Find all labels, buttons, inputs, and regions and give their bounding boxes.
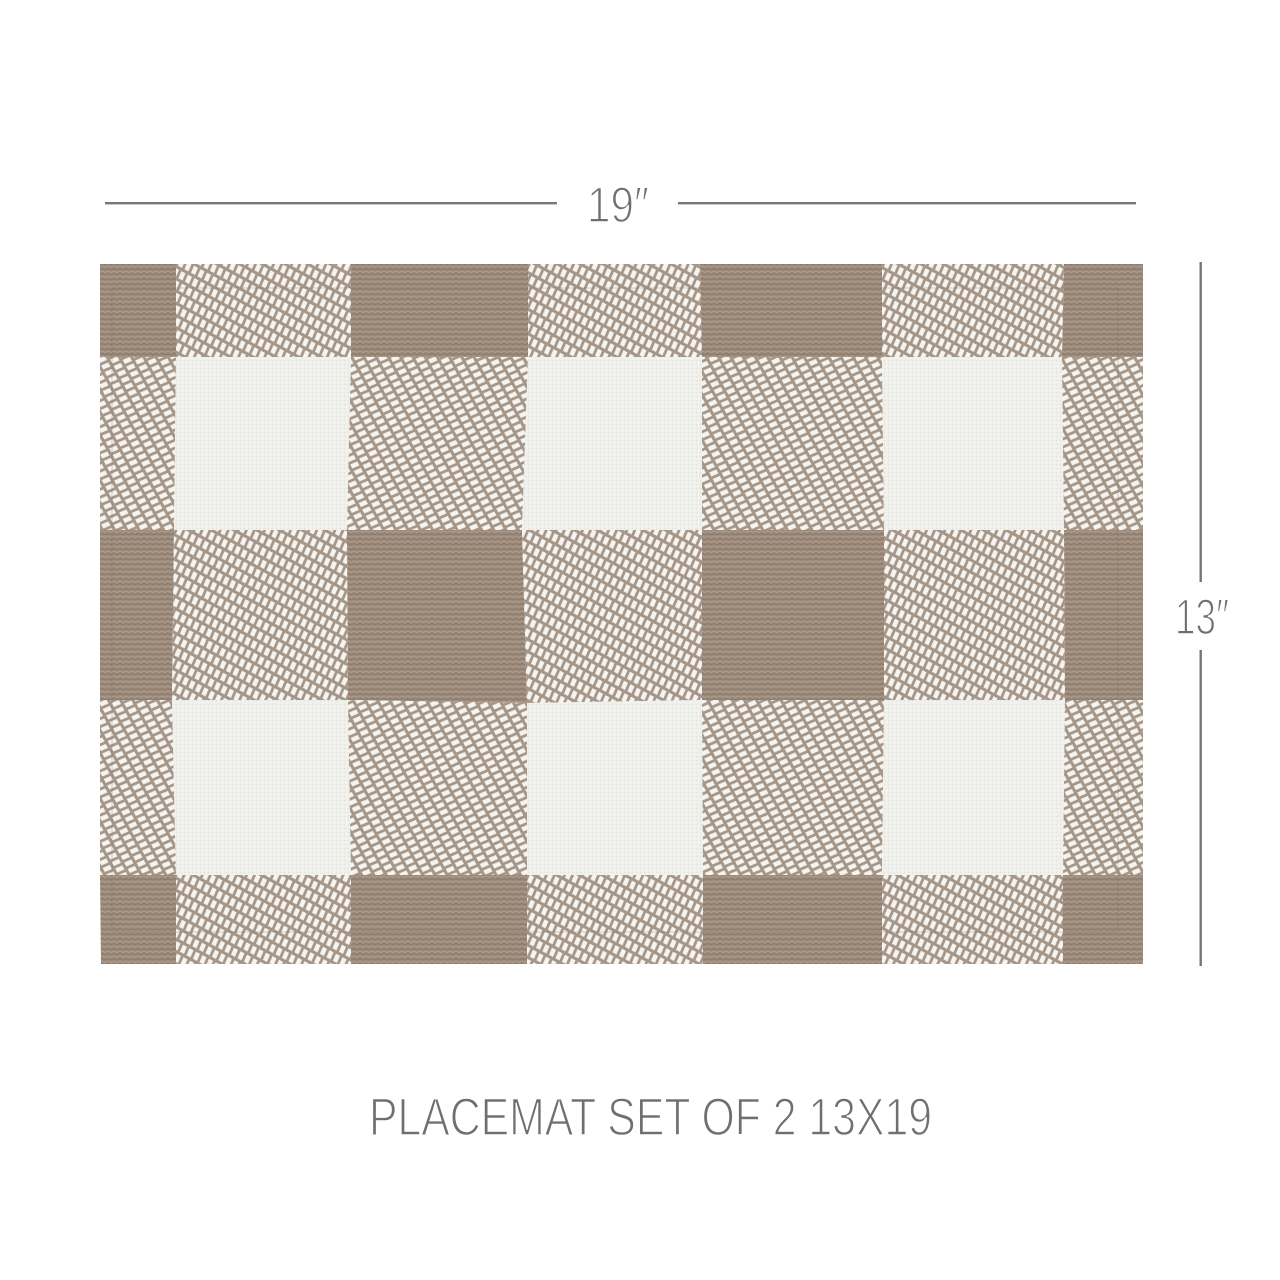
second row of checks [100,357,1143,530]
middle row of checks [100,530,1143,703]
height dimension: 13 inches: 13″ [1175,589,1229,645]
hem stitching [112,288,1118,932]
width dimension: 19 inches: 19″ [587,177,649,233]
placemat: buffalo check fabric [100,264,1143,964]
caption: PLACEMAT SET OF 2 13X19 [369,1088,932,1147]
fourth row of checks [100,700,1143,875]
top row of checks [100,264,1143,357]
bottom row of checks [100,875,1143,964]
